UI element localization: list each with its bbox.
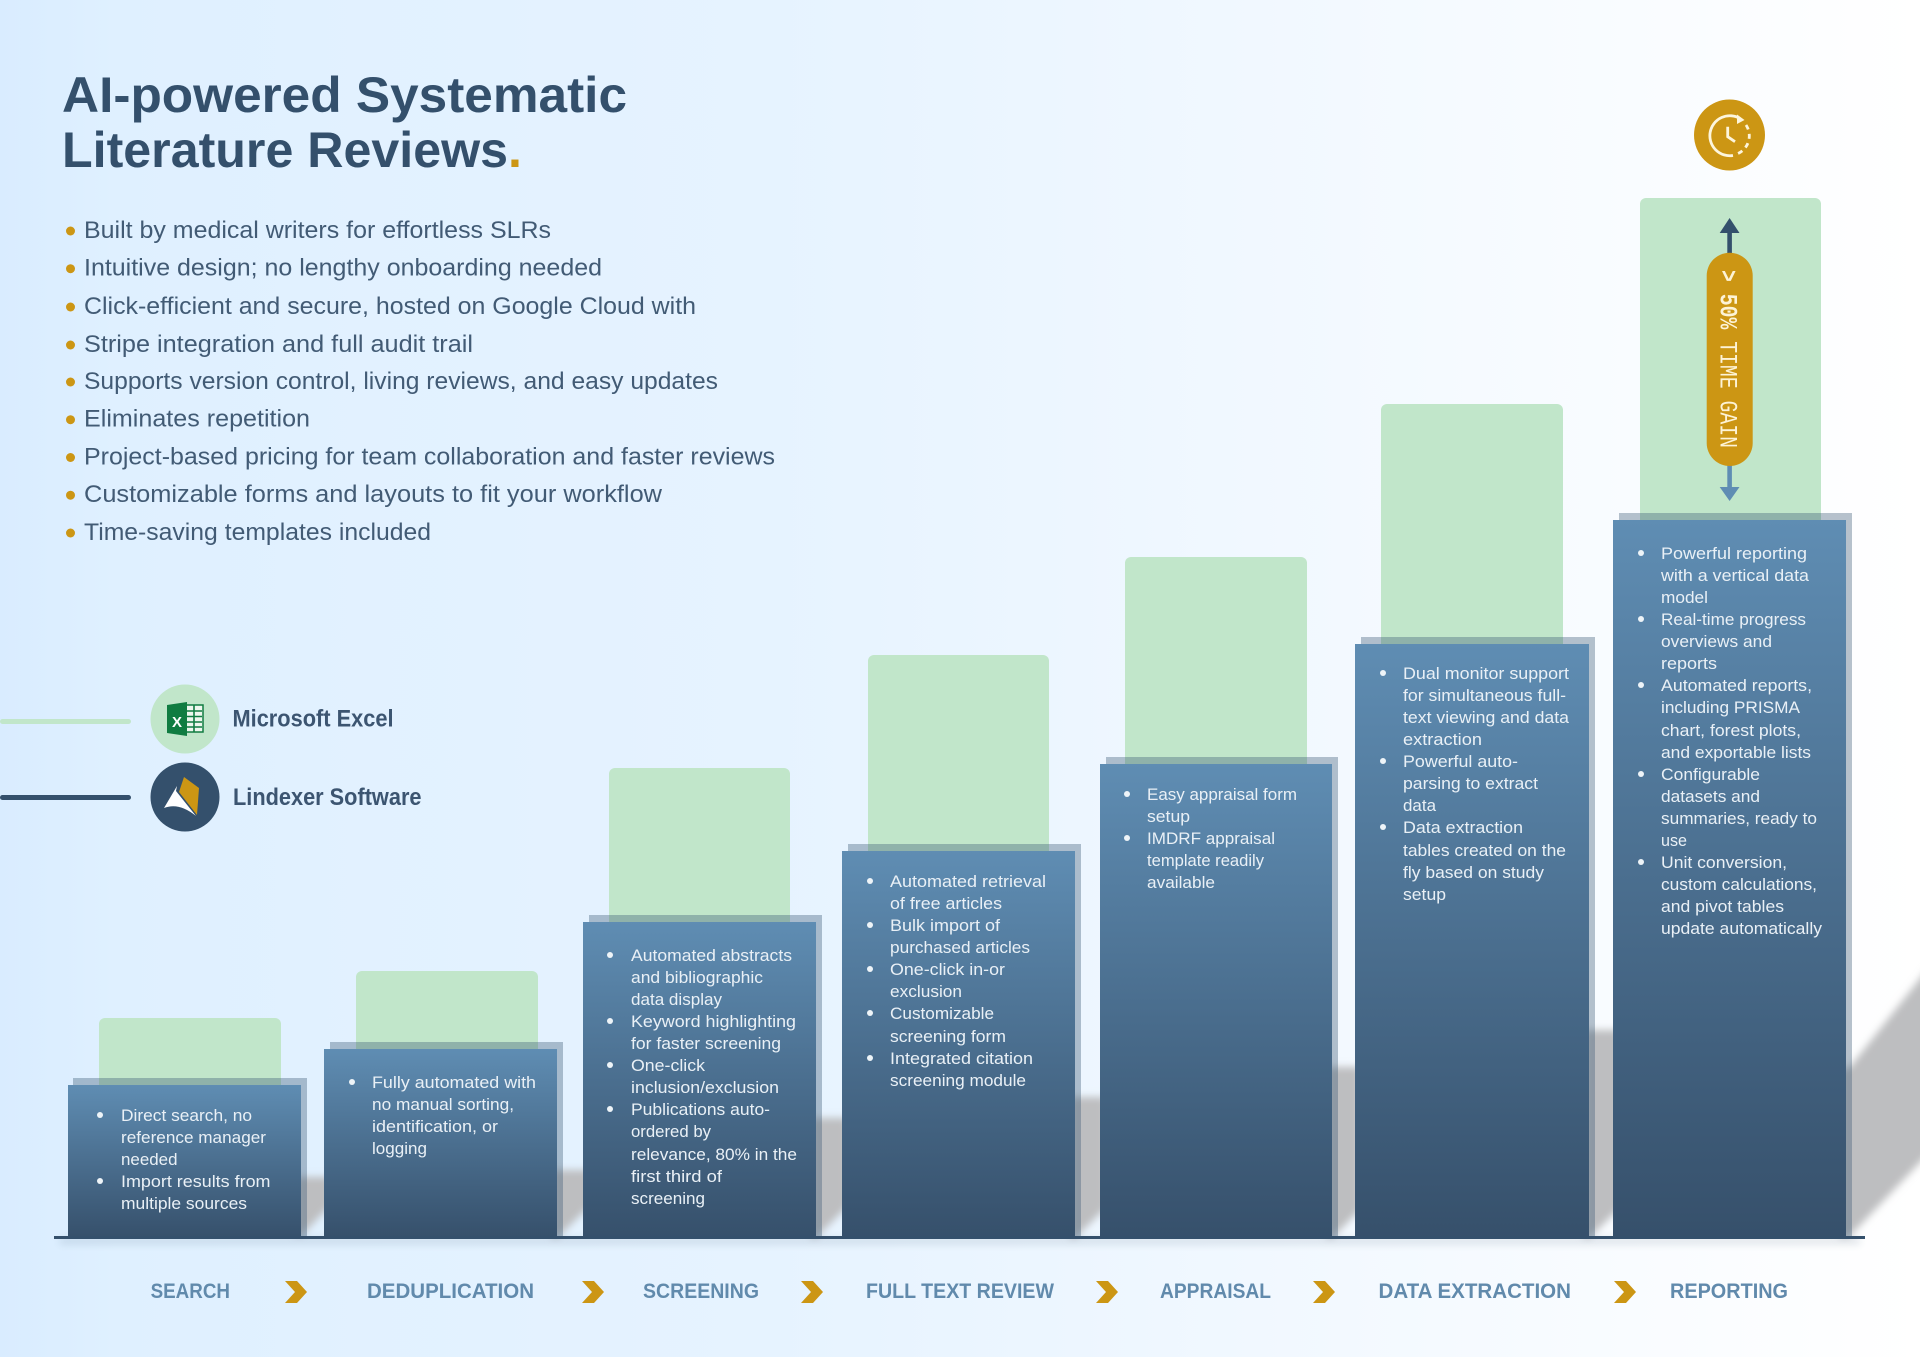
reporting text: custom calculations, <box>1661 875 1817 894</box>
reporting text: Automated reports, <box>1661 676 1812 695</box>
legend: Microsoft Excel <box>0 684 394 754</box>
reporting text: use <box>1661 831 1687 850</box>
appraisal text: template readily <box>1147 851 1264 870</box>
deduplication text: identification, or <box>372 1117 498 1136</box>
panel: appraisal step <box>1100 557 1338 1238</box>
data extraction text: setup <box>1403 885 1446 904</box>
deduplication text: no manual sorting, <box>372 1095 514 1114</box>
icon: Lindexer logo <box>164 777 199 816</box>
full text review text: Integrated citation <box>890 1049 1033 1068</box>
deduplication text: Fully automated with <box>372 1073 536 1092</box>
reporting text: Powerful reporting <box>1661 544 1807 563</box>
search text: Direct search, no <box>121 1106 252 1125</box>
arrow: up <box>1720 218 1740 254</box>
feature list: Click-efficient and secure, hosted on Google Cloud with <box>84 293 696 320</box>
title: Literature Reviews. <box>62 122 522 178</box>
reporting text: reports <box>1661 654 1717 673</box>
feature list: Eliminates repetition <box>84 406 310 433</box>
panel: deduplication step <box>324 971 563 1238</box>
panel: search step <box>68 1018 307 1238</box>
appraisal text: setup <box>1147 807 1190 826</box>
reporting text: Unit conversion, <box>1661 853 1787 872</box>
legend: Lindexer Software: Lindexer Software <box>233 784 422 811</box>
feature list <box>66 217 775 546</box>
full text review text: screening form <box>890 1027 1006 1046</box>
reporting text: datasets and <box>1661 787 1760 806</box>
reporting text: update automatically <box>1661 919 1823 938</box>
icon: clock <box>1694 100 1765 170</box>
step labels <box>151 1280 1788 1303</box>
icon: Excel: X <box>172 714 182 731</box>
baseline floor shadow <box>60 1238 1860 1244</box>
screening text: ordered by <box>631 1122 711 1141</box>
screening text: first third of <box>631 1167 722 1186</box>
screening text: Automated abstracts <box>631 946 792 965</box>
search text: reference manager <box>121 1128 266 1147</box>
data extraction text: text viewing and data <box>1403 708 1570 727</box>
step labels: DEDUPLICATION <box>367 1280 534 1303</box>
legend: Lindexer Software <box>0 762 422 832</box>
screening text: Publications auto- <box>631 1100 770 1119</box>
appraisal text: Easy appraisal form <box>1147 785 1297 804</box>
reporting text: and pivot tables <box>1661 897 1784 916</box>
panel: full text review step <box>842 655 1081 1238</box>
reporting text: model <box>1661 588 1708 607</box>
deduplication text: logging <box>372 1139 427 1158</box>
data extraction text: Powerful auto- <box>1403 752 1518 771</box>
appraisal text: available <box>1147 873 1215 892</box>
full text review text: Customizable <box>890 1004 994 1023</box>
title <box>62 67 627 178</box>
screening text: for faster screening <box>631 1034 781 1053</box>
data extraction text: data <box>1403 796 1437 815</box>
full text review text: purchased articles <box>890 938 1030 957</box>
step labels: REPORTING <box>1670 1280 1788 1303</box>
step labels: FULL TEXT REVIEW <box>866 1280 1054 1303</box>
step labels: DATA EXTRACTION <box>1378 1280 1571 1303</box>
feature list: Stripe integration and full audit trail <box>84 331 473 358</box>
feature list: Built by medical writers for effortless SLRs <box>84 217 551 244</box>
data extraction text <box>1380 664 1570 904</box>
time gain pill <box>1707 253 1753 466</box>
panel: reporting step <box>1613 198 1852 1238</box>
reporting text: Configurable <box>1661 765 1760 784</box>
screening text: One-click <box>631 1056 706 1075</box>
search text <box>97 1106 270 1213</box>
feature list: Intuitive design; no lengthy onboarding needed <box>84 255 602 282</box>
time gain pill: > 50% TIME GAIN <box>1712 270 1742 448</box>
full text review text: Automated retrieval <box>890 872 1046 891</box>
full text review text: exclusion <box>890 982 962 1001</box>
search text: needed <box>121 1150 178 1169</box>
search text: Import results from <box>121 1172 270 1191</box>
full text review text <box>867 872 1046 1090</box>
baseline <box>54 1236 1865 1239</box>
cast shadows behind bars <box>296 966 1920 1238</box>
screening text: and bibliographic <box>631 968 764 987</box>
reporting text: Real-time progress <box>1661 610 1806 629</box>
feature list: Project-based pricing for team collaboration and faster reviews <box>84 444 775 470</box>
full text review text: Bulk import of <box>890 916 1000 935</box>
reporting text <box>1638 544 1823 938</box>
panel: screening step <box>583 768 822 1238</box>
full text review text: of free articles <box>890 894 1002 913</box>
data extraction text: tables created on the <box>1403 841 1566 860</box>
step labels: SCREENING <box>643 1280 759 1303</box>
data extraction text: extraction <box>1403 730 1482 749</box>
data extraction text: Data extraction <box>1403 818 1523 837</box>
screening text: screening <box>631 1189 705 1208</box>
data extraction text: for simultaneous full- <box>1403 686 1566 705</box>
title: AI-powered Systematic <box>62 67 627 123</box>
feature list: Supports version control, living reviews, and easy updates <box>84 368 718 395</box>
full text review text: screening module <box>890 1071 1026 1090</box>
reporting text: summaries, ready to <box>1661 809 1817 828</box>
appraisal text <box>1124 785 1297 892</box>
reporting text: with a vertical data <box>1660 566 1810 585</box>
screening text: inclusion/exclusion <box>631 1078 779 1097</box>
feature list: Time-saving templates included <box>84 519 431 546</box>
reporting text: overviews and <box>1661 632 1772 651</box>
data extraction text: parsing to extract <box>1403 774 1538 793</box>
search text: multiple sources <box>121 1194 247 1213</box>
full text review text: One-click in-or <box>890 960 1005 979</box>
screening text: data display <box>631 990 722 1009</box>
icon: Excel <box>167 702 203 736</box>
appraisal text: IMDRF appraisal <box>1147 829 1275 848</box>
reporting text: including PRISMA <box>1661 698 1801 717</box>
data extraction text: fly based on study <box>1403 863 1545 882</box>
data extraction text: Dual monitor support <box>1403 664 1569 683</box>
panel: data extraction step <box>1355 404 1595 1238</box>
screening text: Keyword highlighting <box>631 1012 796 1031</box>
reporting text: and exportable lists <box>1661 743 1811 762</box>
deduplication text <box>349 1073 536 1158</box>
step labels: APPRAISAL <box>1160 1280 1271 1303</box>
screening text <box>607 946 797 1208</box>
legend: Microsoft Excel: Microsoft Excel <box>232 706 394 732</box>
reporting text: chart, forest plots, <box>1661 721 1801 740</box>
feature list: Customizable forms and layouts to fit your workflow <box>84 481 663 508</box>
screening text: relevance, 80% in the <box>631 1145 797 1164</box>
arrow: down <box>1720 465 1740 501</box>
chevron arrows <box>285 1281 1636 1303</box>
step labels: SEARCH <box>151 1280 230 1303</box>
